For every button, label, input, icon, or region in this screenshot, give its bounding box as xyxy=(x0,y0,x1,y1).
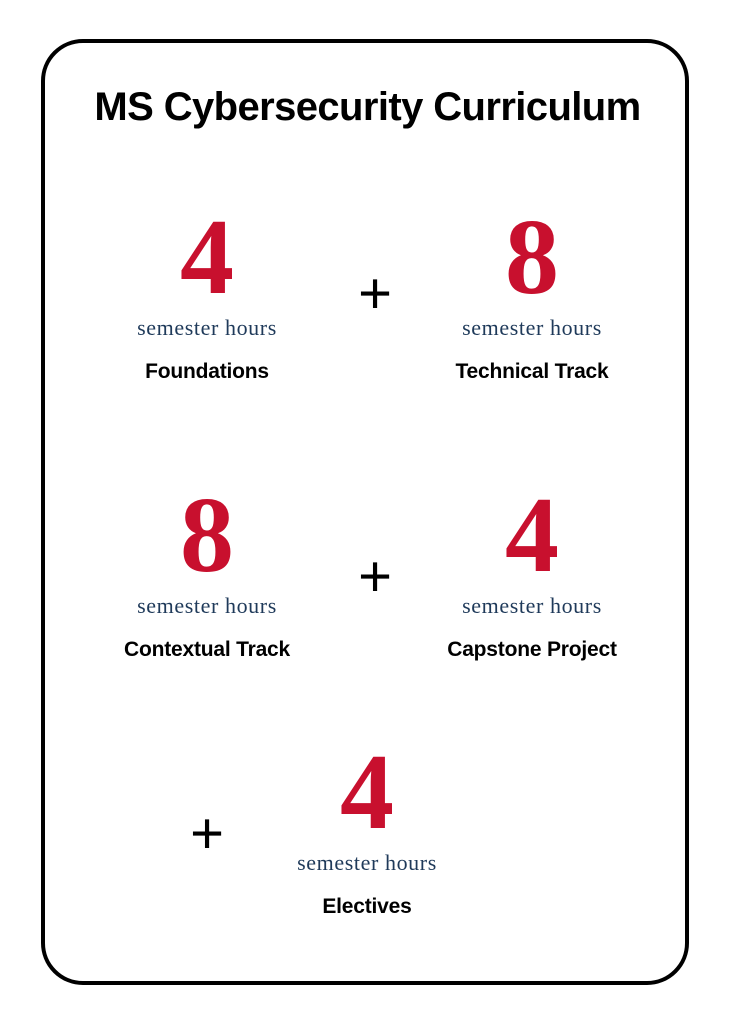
title: MS Cybersecurity Curriculum xyxy=(94,85,641,129)
block: contextual track xyxy=(124,476,290,661)
block: electives xyxy=(297,733,437,918)
block: technical track xyxy=(455,198,609,383)
block: foundations: 4 xyxy=(180,198,234,317)
block: contextual track: semester hours xyxy=(137,593,277,618)
plus 3: + xyxy=(190,801,224,866)
plus 2: + xyxy=(358,544,392,609)
block: foundations xyxy=(137,198,277,383)
block: capstone project: Capstone Project xyxy=(447,638,617,661)
block: technical track: semester hours xyxy=(462,315,602,340)
block: technical track: 8 xyxy=(505,198,559,317)
block: contextual track: 8 xyxy=(180,476,234,595)
block: technical track: Technical Track xyxy=(455,360,609,383)
block: capstone project: 4 xyxy=(505,476,559,595)
block: capstone project xyxy=(447,476,617,661)
block: electives: Electives xyxy=(322,895,412,918)
block: foundations: Foundations xyxy=(145,360,269,383)
block: foundations: semester hours xyxy=(137,315,277,340)
block: capstone project: semester hours xyxy=(462,593,602,618)
block: electives: 4 xyxy=(340,733,394,852)
block: contextual track: Contextual Track xyxy=(124,638,290,661)
block: electives: semester hours xyxy=(297,850,437,875)
plus 1: + xyxy=(358,261,392,326)
